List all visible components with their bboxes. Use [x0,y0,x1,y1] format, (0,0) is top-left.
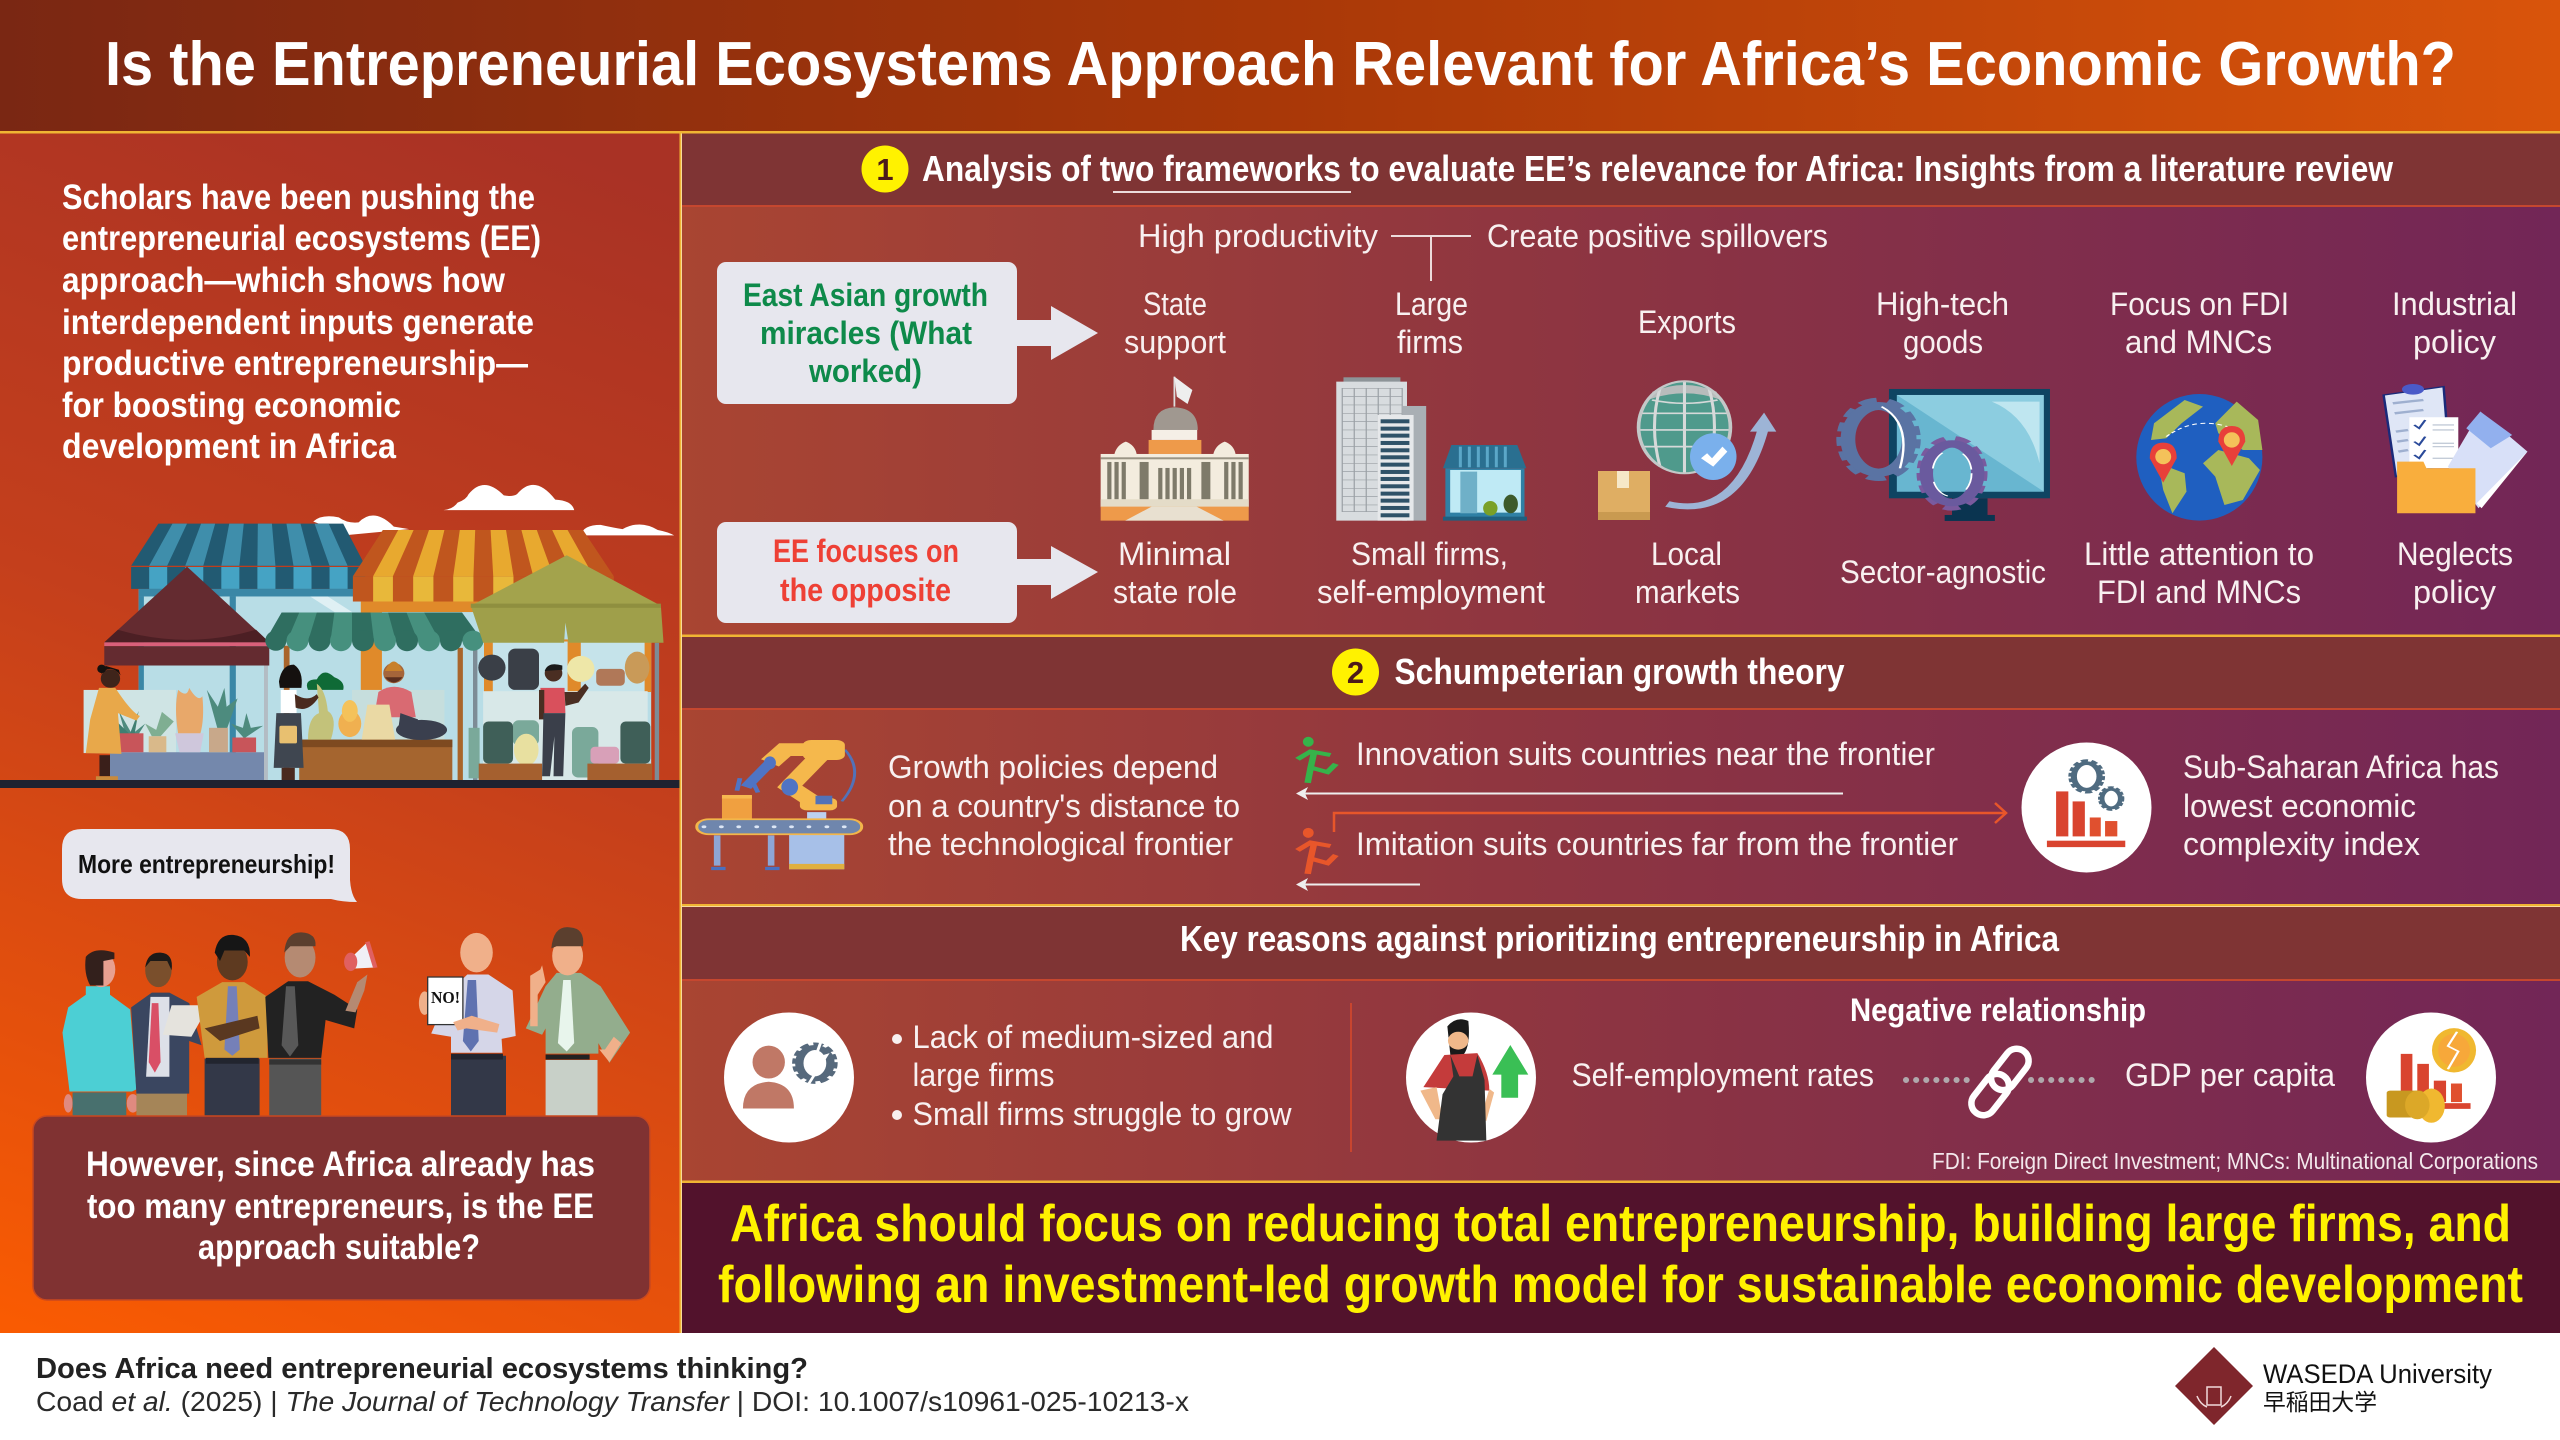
panel: left context [0,133,680,1333]
intro text: approach—which shows how [62,261,506,300]
box: East Asian growth miracles [717,262,1098,404]
illustration: people debating [62,927,630,1116]
text: Sub-Saharan Africa: complexity index [2183,826,2420,862]
sign text: NO! [431,988,460,1007]
footer: citation: Does Africa need entrepreneurial ecosystems thinking? [36,1353,808,1385]
logo: Waseda University [2175,1347,2492,1425]
callout: question: too many entrepreneurs, is the EE [87,1187,594,1226]
column: exports [1598,304,1776,610]
column: policy: Neglects [2397,536,2513,572]
column: high-tech: High-tech [1876,286,2009,322]
box: EE focuses on the opposite [717,522,1098,623]
text: growth policies: on a country's distance to [888,788,1240,824]
icon: self-employed woman [1406,1012,1536,1142]
column: firms: self-employment [1317,574,1545,610]
icon: GDP chart and coins [2366,1012,2496,1142]
imitation row: Imitation suits countries far from the frontier [1356,826,1958,862]
column: exports: Exports [1638,304,1736,340]
heading: section 2: 2 [1347,655,1364,690]
intro text: Scholars have been pushing the [62,178,535,217]
icon: documents and folder [2384,384,2527,513]
column: policy: Industrial [2392,286,2517,322]
heading: section 2 [1332,648,1844,696]
icon: skyscraper and shop [1336,377,1527,521]
column: state: State [1143,286,1207,322]
bullet list [892,1019,1292,1132]
intro text: entrepreneurial ecosystems (EE) [62,219,541,258]
column: FDI [2084,286,2314,610]
box: EE focuses on the opposite: the opposite [780,572,951,608]
text: Sub-Saharan Africa [2183,749,2499,862]
arrow: short white [1296,878,1420,891]
text: Sub-Saharan Africa: Sub-Saharan Africa has [2183,749,2499,785]
icon: dotted chain link [1906,1044,2100,1120]
icon: government building [1101,377,1249,521]
column: state: state role [1113,574,1237,610]
title bar: Is the Entrepreneurial Ecosystems Approach Relevant for Africa’s Economic Growth? [105,30,2456,99]
illustration: market stalls [84,485,674,780]
text: growth policies [888,749,1240,862]
icon: person with broken gear [724,1012,854,1142]
imitation row [1296,803,2006,891]
footer: citation [36,1353,1189,1417]
heading: key reasons: Key reasons against prioritizing entrepreneurship in Africa [1180,918,2060,959]
box: East Asian growth miracles: East Asian growth [743,277,988,313]
column: state: Minimal [1118,536,1231,572]
intro text: development in Africa [62,427,396,466]
group against EE [419,927,630,1116]
callout: question [33,1116,650,1300]
column: firms [1317,286,1545,610]
column: high-tech: goods [1903,324,1983,360]
panel: section 2 Schumpeterian growth theory [682,637,2560,904]
icon: orange runner [1297,828,1336,874]
innovation row: Innovation suits countries near the frontier [1356,736,1935,772]
heading: section 1: Analysis of two frameworks to evaluate EE’s relevance for Africa: Insights from a literature review [922,148,2394,189]
column: FDI: Little attention to [2084,536,2314,572]
logo: Waseda University: WASEDA University [2263,1359,2492,1389]
column: policy: policy [2413,574,2496,610]
column: exports: markets [1635,574,1740,610]
icon: monitor with gears [1844,389,2050,521]
column: firms: Large [1395,286,1468,322]
intro text [62,178,541,466]
icon: green runner [1297,737,1336,783]
arrow: orange elbow to index [1334,803,2006,832]
icon: complexity chart [2022,742,2152,872]
column: firms: firms [1397,324,1463,360]
column: FDI: FDI and MNCs [2097,574,2301,610]
icon: earth with pins [2136,394,2262,521]
bullet list: Lack of medium-sized and [912,1019,1274,1055]
panel: conclusion [682,1183,2560,1333]
column: high-tech: Sector-agnostic [1840,554,2046,590]
column: firms: Small firms, [1351,536,1508,572]
column: policy [2384,286,2527,610]
large firms attributes: High productivity [1138,218,1378,254]
bullet list: Small firms struggle to grow [912,1096,1292,1132]
heading: negative relationship: Negative relationship [1850,992,2146,1028]
text: self-employment rates: Self-employment rates [1572,1057,1874,1093]
column: state: support [1124,324,1226,360]
box: East Asian growth miracles: worked) [808,353,922,389]
group for EE [62,932,378,1116]
heading: section 1: 1 [876,152,894,187]
column: state [1101,286,1249,610]
column: FDI: Focus on FDI [2110,286,2289,322]
box: East Asian growth miracles: miracles (What [760,315,972,351]
text: GDP per capita: GDP per capita [2125,1057,2335,1093]
arrow: long white [1296,787,1843,800]
large firms attributes: Create positive spillovers [1487,218,1828,254]
speech bubble: More entrepreneurship!: More entrepreneurship! [78,849,335,879]
intro text: interdependent inputs generate [62,303,534,342]
logo: Waseda University: 早稲田大学 [2263,1389,2377,1415]
icon: globe with box and arrow [1598,381,1776,520]
intro text: for boosting economic [62,386,401,425]
callout: question: However, since Africa already has [86,1145,595,1184]
icon: robot arm on conveyor [697,740,862,869]
column: policy: policy [2413,324,2496,360]
text: Sub-Saharan Africa: lowest economic [2183,788,2416,824]
text: growth policies: Growth policies depend [888,749,1218,785]
callout: question: approach suitable? [198,1228,480,1267]
box: EE focuses on the opposite: EE focuses on [773,533,959,569]
ground strip [0,780,680,788]
text: growth policies: the technological frontier [888,826,1233,862]
heading: section 2: Schumpeterian growth theory [1394,651,1844,692]
column: exports: Local [1651,536,1722,572]
panel: section 1 frameworks [682,133,2560,635]
footer: citation: Coad et al. (2025) | The Journal of Technology Transfer | DOI: 10.1007/s10961-025-10213-x [36,1386,1189,1417]
intro text: productive entrepreneurship— [62,344,528,383]
bullet list: large firms [912,1057,1054,1093]
innovation row [1296,736,1935,800]
column: high-tech [1840,286,2050,590]
column: FDI: and MNCs [2125,324,2272,360]
large firms attributes [1138,218,1828,281]
speech bubble: More entrepreneurship! [62,829,357,902]
title bar [0,0,2560,131]
panel: key reasons [682,907,2560,1181]
